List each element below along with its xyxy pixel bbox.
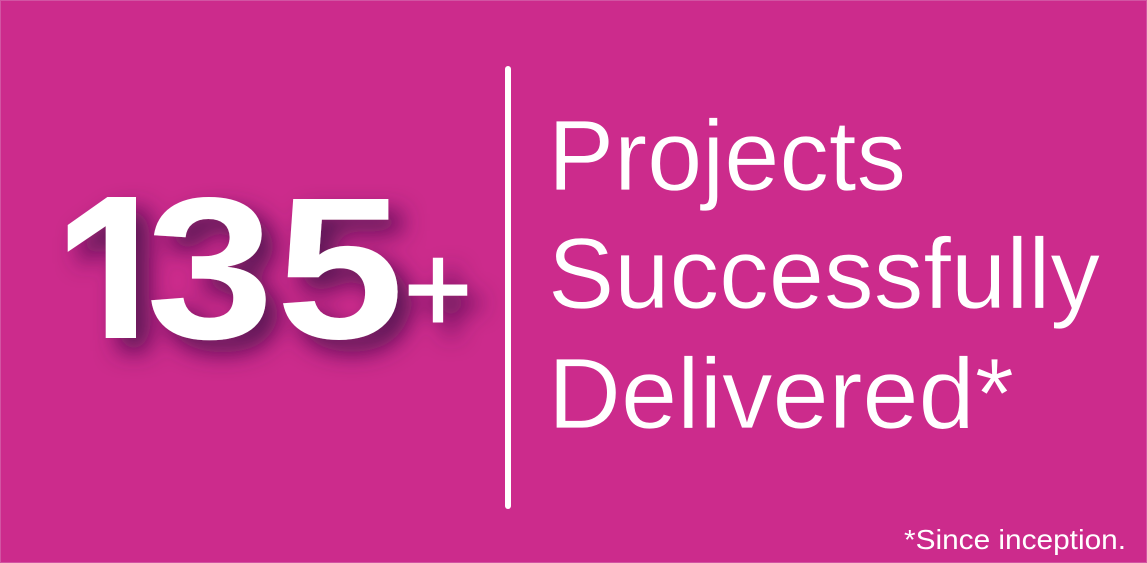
text: Projects Successfully Delivered*: Delivered* [548,338,1014,450]
big number: 135+: 5 [276,155,404,381]
big number: 135+: 3 [146,155,274,381]
big number: 135+: + [404,218,472,361]
footnote: *Since inception. [904,524,1126,555]
vertical divider [505,66,511,509]
text: Projects Successfully Delivered*: Projects [548,100,906,212]
text: Projects Successfully Delivered* [548,100,1100,450]
text: Projects Successfully Delivered*: Successfully [548,218,1100,330]
big number: 135+ [66,194,490,369]
big number: 135+: 1 [52,143,180,422]
